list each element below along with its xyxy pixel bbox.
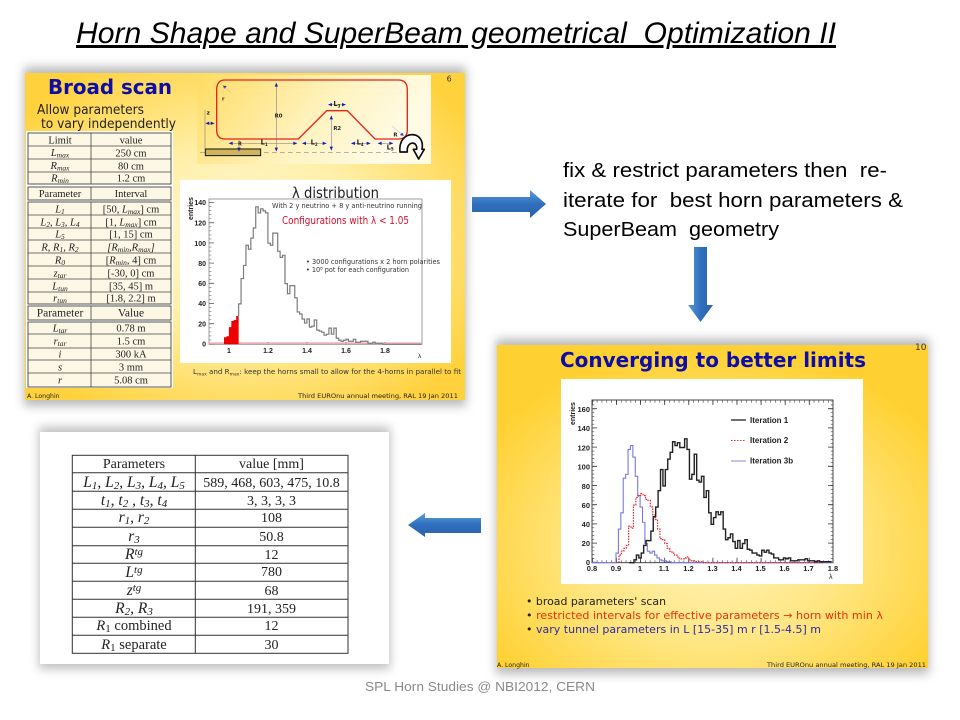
diagram: horn shape: L [333,100,338,108]
table: parameter limits and intervals: L [40,218,46,228]
panel: final parameters table: z [127,582,133,599]
table: parameter limits and intervals: 1 [59,245,63,254]
chart: lambda iterations: 1 [638,564,642,573]
panel: final parameters table: r [119,509,125,526]
red shaded bars: lambda below 1.05 [224,316,239,344]
chart: lambda iterations: 40 [582,520,590,529]
panel: final parameters table: 1 [125,515,130,527]
chart: lambda distribution: 1 [227,348,231,355]
panel: final parameters table: tg [134,564,143,576]
chart: lambda iterations: 1.4 [731,564,743,573]
text: allow parameters: to vary independently [41,116,176,132]
table: parameter limits and intervals: 1.5 cm [117,336,145,348]
chart: lambda distribution: 0 [202,342,206,348]
table: parameter limits and intervals: L [53,324,59,334]
table: parameter limits and intervals: [1.8, 2.2] m [106,294,156,304]
title: Horn Shape and SuperBeam geometrical Optimization II [76,17,836,50]
table: parameter limits and intervals: 1 [61,207,65,216]
diagram: horn shape: 5 [391,147,394,152]
table: parameter limits and intervals: [50, L [103,204,128,216]
table: parameter limits and intervals: ] [150,242,155,254]
diagram: horn shape [197,75,452,164]
chart: lambda iterations: 1.2 [683,564,694,573]
panel: final parameters table: 1 [92,480,97,492]
diagram: horn shape: 2 [315,142,318,147]
diagram: horn shape: L [261,139,265,147]
table: parameter limits and intervals: L [51,148,57,159]
chart: lambda iterations: 80 [582,482,590,491]
chart: lambda distribution: 140 [194,200,206,207]
chart: lambda iterations: 1.8 [828,564,838,573]
panel: final parameters table: 3 [146,606,153,618]
diagram: horn shape: R [238,141,242,147]
text block: iterate note: fix & restrict parameters then re- [563,159,887,182]
diagram: horn shape: 1 [265,142,268,147]
table: parameter limits and intervals: Parameter [39,189,82,200]
panel: final parameters table: 1 [110,642,116,654]
panel: final parameters table: , t [150,492,162,509]
panel: final parameters table: , L [163,474,179,491]
panel: final parameters table: 12 [264,548,278,563]
panel: final parameters table: 12 [264,619,278,634]
table: parameter limits and intervals: R [55,256,61,266]
table: parameter limits and intervals: [R [107,242,118,254]
table: parameter limits and intervals [26,131,173,388]
table: parameter limits and intervals: [-30, 0] cm [108,268,154,280]
table: parameter limits and intervals: value [120,136,143,146]
chart: lambda distribution: With 2 y neutrino + 8 y anti-neutrino running [272,201,422,210]
chart: lambda distribution: • 10⁸ pot for each configuration [306,265,409,274]
panel: final parameters table: 780 [261,565,282,580]
table: parameter limits and intervals: max [128,207,141,216]
panel: final parameters table: 68 [264,584,278,599]
panel: final parameters table: R [95,618,105,634]
table: parameter limits and intervals: , L [50,218,61,228]
legend: Iteration 2 [750,436,789,445]
legend: Iteration 3b [750,456,793,466]
panel: final parameters table: 1 [105,498,111,510]
table: parameter limits and intervals: max [57,164,70,172]
chart: lambda iterations: 1.3 [707,564,718,573]
heading: converging: Converging to better limits [560,348,866,372]
histogram: iteration 3b [592,446,833,563]
table: parameter limits and intervals: R [51,174,58,184]
panel: final parameters table: combined [111,618,172,634]
chart: lambda distribution [180,180,451,363]
text: allow parameters: Allow parameters [37,102,144,118]
chart: lambda iterations: 20 [582,539,590,548]
histogram: iteration 2 [619,494,824,563]
footer: slide author: A. Longhin [27,393,60,400]
bullet list: • vary tunnel parameters in L [15-35] m r [1.5-4.5] m [526,623,821,636]
table: parameter limits and intervals: , R [63,242,75,254]
table: parameter limits and intervals: Interval [115,189,147,200]
panel: final parameters table: 2 [144,515,150,527]
chart: lambda distribution: 80 [198,261,206,268]
table: parameter limits and intervals: max [125,220,138,229]
table: parameter limits and intervals: r [58,376,63,386]
chart: lambda distribution: entries [188,197,195,220]
table: parameter limits and intervals: min [118,245,129,254]
table: parameter limits and intervals: R, R [41,242,59,254]
legend: Iteration 1 [750,416,789,425]
table: parameter limits and intervals: Parameter [37,308,83,320]
text block: iterate note: SuperBeam geometry [563,218,780,241]
panel: final parameters table: , L [141,474,157,491]
panel: final parameters table: tg [134,546,144,558]
chart: lambda iterations: 1.6 [779,564,790,573]
table: parameter limits and intervals: z [54,268,58,280]
diagram: horn shape: z [207,111,211,117]
chart: lambda distribution: 1.4 [302,348,312,355]
legend [731,416,793,466]
table: parameter limits and intervals: 5 [61,232,65,241]
panel: final parameters table [39,427,390,669]
panel: final parameters table: , t [111,492,123,509]
panel: final parameters table: , t [128,492,145,509]
chart: lambda iterations: 60 [582,501,590,510]
table: parameter limits and intervals: L [55,204,61,216]
table: parameter limits and intervals: min [116,258,127,267]
table: parameter limits and intervals: L [52,282,58,292]
chart: lambda distribution: 60 [198,281,206,288]
diagram: horn shape: R2 [333,126,341,132]
panel: final parameters table: 30 [264,638,278,653]
footer: meeting: Third EUROnu annual meeting, RAL 19 Jan 2011 [766,662,926,669]
diagram: horn shape: r [222,97,225,103]
diagram: horn shape: R [393,133,397,139]
panel: converging slide [496,339,929,674]
panel: final parameters table: 50.8 [259,530,284,545]
bullet list: • broad parameters' scan [526,595,666,608]
chart: lambda distribution: 20 [198,322,206,328]
note: lmax and rmax: : keep the horns small to allow for the 4-horns in parallel to fit [239,367,461,376]
panel: final parameters table: 2 [123,498,129,510]
panel: final parameters table: 3 [133,534,140,546]
chart: lambda distribution: 1.2 [263,348,273,355]
chart: lambda distribution: 1.6 [341,348,351,355]
table: parameter limits and intervals: 80 cm [118,162,144,172]
panel: final parameters table: 3 [135,480,142,492]
chart: lambda iterations: 140 [577,424,590,433]
panel: final parameters table: , R [130,600,148,617]
table: parameter limits and intervals: 1.2 cm [117,174,145,184]
panel: final parameters table: , L [97,474,114,491]
panel: final parameters table: t [101,492,105,509]
text block: iterate note: iterate for best horn parameters & [563,189,903,212]
panel: final parameters table: 589, 468, 603, 475, 10.8 [203,476,340,491]
table: parameter limits and intervals: 5.08 cm [114,376,148,386]
table: parameter limits and intervals: Value [118,308,144,320]
histogram: iteration 1 [629,439,832,563]
table: parameter limits and intervals: 2 [46,220,50,229]
table: parameter limits and intervals: tar [58,271,66,280]
panel: final parameters table: 191, 359 [247,602,296,617]
chart: lambda iterations: 1.7 [803,564,814,573]
chart: lambda distribution: 40 [198,301,206,308]
diagram: horn shape: 3 [338,103,341,108]
panel: final parameters table: , L [119,474,136,491]
arrow: down [688,247,713,322]
table: parameter limits and intervals: [R [106,256,116,266]
page number: 10 [915,343,927,353]
table: parameter limits and intervals: , 4] cm [127,256,156,266]
panel: final parameters table: 2 [125,606,131,618]
chart: lambda distribution: λ distribution [292,184,379,202]
bullet list: • restricted intervals for effective parameters → horn with min λ [526,609,883,622]
chart: lambda distribution: • 3000 configurations x 2 horn polarities [306,257,440,266]
table: parameter limits and intervals: ,R [129,242,139,254]
chart: lambda iterations: λ [829,574,833,581]
panel: final parameters table: L [83,474,92,491]
table: parameter limits and intervals: R [51,161,57,172]
panel: final parameters table: separate [116,637,167,653]
table: parameter limits and intervals: tar [59,326,67,335]
chart: lambda iterations: 160 [577,405,590,414]
note: lmax and rmax: L [193,367,197,376]
diagram: horn shape: 6 [447,75,452,84]
table: parameter limits and intervals: , L [65,218,76,228]
chart: lambda iterations: entries [570,402,577,425]
table: parameter limits and intervals: [1, 15] cm [109,230,153,240]
diagram: horn shape: L [387,143,391,151]
chart: lambda distribution: 100 [194,241,206,248]
panel: final parameters table: 3 [143,498,150,510]
icon: rotation arrow [400,135,424,159]
chart: lambda iterations [561,379,863,584]
table: parameter limits and intervals: tun [57,296,67,305]
note: lmax and rmax: max [197,372,207,378]
table: parameter limits and intervals: [1, L [105,218,125,228]
chart: lambda iterations: 120 [577,444,590,452]
diagram: horn shape: R0 [275,113,283,119]
table: parameter limits and intervals: min [58,176,69,185]
table: parameter limits and intervals: tar [58,339,66,348]
table: parameter limits and intervals: 0 [61,258,65,267]
chart: lambda distribution: 1.8 [380,348,390,355]
panel: broad scan slide [24,67,466,406]
chart: lambda iterations: 0 [586,558,590,567]
footer: meeting: Third EUROnu annual meeting, RAL 19 Jan 2011 [297,393,458,400]
footer: conference: SPL Horn Studies @ NBI2012, CERN [365,680,595,694]
table: parameter limits and intervals: Limit [48,136,72,146]
footer: author: A. Longhin [497,662,530,669]
chart: lambda distribution: λ [418,353,422,360]
note: lmax and rmax: and R [207,367,230,376]
table: parameter limits and intervals: max [57,150,70,160]
arrow: left [408,513,481,537]
table: parameter limits and intervals: 0.78 m [116,324,146,334]
diagram: horn shape: 4 [361,142,364,147]
panel: final parameters table: Parameters [103,457,165,472]
diagram: horn shape: L [311,139,315,147]
panel: final parameters table: 5 [179,480,185,492]
table: parameter limits and intervals: i [59,350,62,360]
table: parameter limits and intervals: 300 kA [115,350,147,360]
table: parameter limits and intervals: 4 [76,220,80,229]
chart: lambda distribution: 120 [194,220,206,228]
table: parameter limits and intervals: 3 [60,220,65,229]
table: parameter limits and intervals: max [138,245,151,254]
chart: lambda iterations: 100 [577,462,590,472]
panel: final parameters table: r [128,528,134,545]
chart: lambda iterations: 1.5 [755,564,766,573]
panel: final parameters table: 4 [162,498,168,510]
table: parameter limits and intervals: ] cm [138,218,157,228]
arrow: right [472,190,546,218]
panel: final parameters table: 4 [157,480,163,492]
chart: lambda iterations: 1.1 [659,564,669,573]
table: parameter limits and intervals: 250 cm [115,148,147,160]
panel: final parameters table: , r [130,509,145,526]
table: parameter limits and intervals: 3 mm [119,362,143,374]
table: parameter limits and intervals: tun [58,284,68,293]
heading: broad scan: Broad scan [48,75,172,99]
table: parameter limits and intervals: 2 [75,245,79,254]
panel: final parameters table: 2 [114,480,120,492]
panel: final parameters table: 1 [105,623,111,635]
panel: final parameters table: value [mm] [239,457,304,472]
table: parameter limits and intervals: s [58,362,62,374]
panel: final parameters table: R [125,546,134,563]
table: parameter limits and intervals: ] cm [140,204,159,216]
chart: lambda iterations: 0.8 [587,564,597,573]
panel: final parameters table: R [115,600,125,617]
note: lmax and rmax: max [230,372,240,378]
table: parameter limits and intervals: L [55,230,61,240]
panel: final parameters table: 3, 3, 3, 3 [247,494,296,509]
chart: lambda distribution: Configurations with λ < 1.05 [282,215,409,227]
diagram: horn shape: L [357,139,361,147]
bullet list [526,595,883,636]
panel: final parameters table: tg [133,582,142,594]
table: parameter limits and intervals: r [53,294,57,304]
panel: final parameters table: R [100,637,110,653]
chart: lambda iterations: 0.9 [611,564,621,573]
histogram line [239,207,422,344]
table: parameter limits and intervals: [35, 45] m [109,282,153,292]
panel: final parameters table: 108 [261,511,282,526]
panel: final parameters table: L [125,564,134,581]
table: parameter limits and intervals: r [54,336,58,348]
